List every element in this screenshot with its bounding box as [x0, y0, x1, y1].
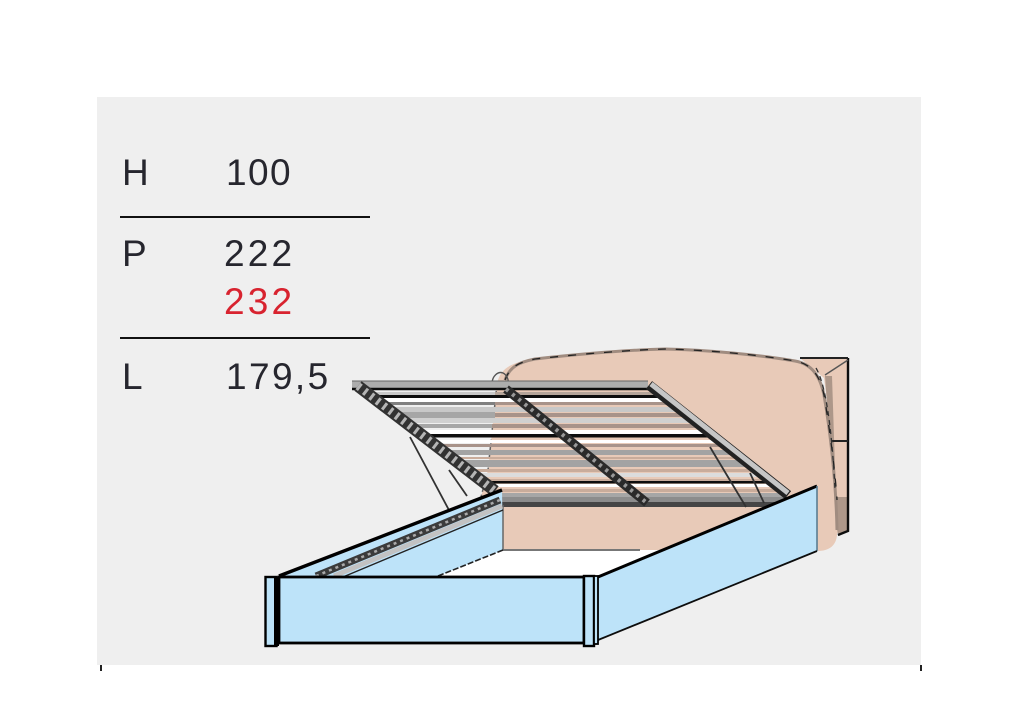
- depth value alternate in red: 232: [224, 281, 295, 322]
- storage floor: [438, 550, 660, 576]
- left panel top edge: [279, 490, 502, 576]
- slatted base: [350, 392, 790, 507]
- headboard outline: [481, 349, 837, 530]
- lift arms: [410, 437, 764, 512]
- frame left rail: [358, 386, 495, 491]
- frame centre rail: [506, 389, 647, 503]
- crop ticks: [101, 665, 921, 671]
- height label: H: [122, 152, 150, 193]
- headboard side: [800, 358, 848, 536]
- width label: L: [122, 356, 144, 397]
- panel: grey background: [97, 97, 921, 665]
- left panel rail: [316, 500, 500, 576]
- frame right rail: [649, 385, 788, 495]
- headboard cushion: [481, 349, 837, 551]
- left side panel: [279, 490, 503, 576]
- right corner post: [584, 576, 598, 646]
- depth value: 222: [224, 233, 295, 274]
- front panel: [279, 577, 584, 643]
- height value: 100: [226, 152, 292, 193]
- bed illustration: [266, 349, 848, 646]
- infographic: bed dimensions: [97, 97, 922, 671]
- raised frame: [352, 381, 788, 503]
- right side panel: [598, 486, 817, 640]
- frame top bar: [352, 381, 648, 388]
- width value: 179,5: [226, 356, 331, 397]
- dimensions table: [120, 152, 370, 397]
- depth label: P: [122, 233, 148, 274]
- left corner post: [266, 577, 279, 646]
